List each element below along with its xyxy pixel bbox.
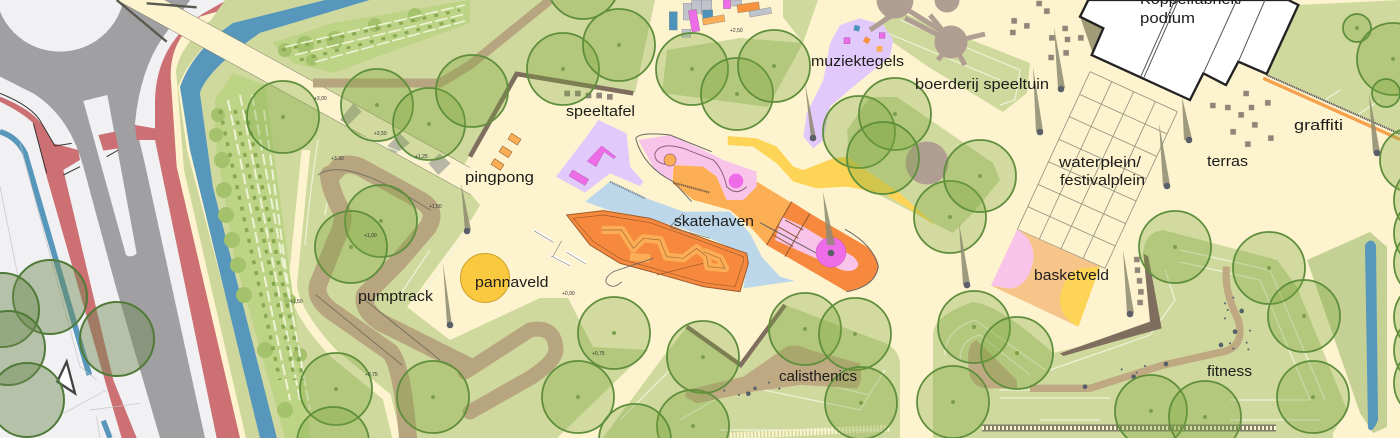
- graffiti wall: [1263, 75, 1400, 139]
- dark orange capsule: [767, 202, 878, 292]
- label: skatehaven: skatehaven: [674, 213, 754, 230]
- label: waterplein / festivalplein: festivalplein: [1060, 172, 1145, 189]
- elevation marks: +3,30: [331, 156, 344, 162]
- label: pingpong: pingpong: [465, 169, 534, 186]
- elevation marks: +0,75: [365, 372, 378, 378]
- skatehaven: [533, 120, 878, 292]
- trees over road: [0, 260, 154, 437]
- terrace wall: [470, 74, 785, 365]
- reed planting strips: [209, 0, 470, 438]
- elevation marks: +0,75: [592, 351, 605, 357]
- elevation marks: +3,00: [314, 96, 327, 102]
- canal bank: [176, 0, 335, 438]
- label: calisthenics: calisthenics: [779, 368, 857, 385]
- building: Koppelfabriek: [1080, 0, 1298, 100]
- label: Koppelfabriek / podium: [1140, 0, 1244, 27]
- speeltafel seats: [564, 91, 613, 100]
- pink bowl: [638, 135, 757, 200]
- top centre coloured blocks: [669, 0, 772, 37]
- elevation marks: +1,00: [364, 233, 377, 239]
- pingpong tables: [491, 133, 521, 170]
- label: waterplein / festivalplein: [1058, 154, 1145, 189]
- label: speeltafel: speeltafel: [566, 103, 635, 120]
- elevation marks: +1,25: [415, 154, 428, 160]
- label: basketveld: basketveld: [1034, 267, 1109, 284]
- label: boerderij speeltuin: boerderij speeltuin: [915, 76, 1049, 93]
- fitness path: [968, 253, 1251, 389]
- yellow ribbon: [728, 136, 937, 227]
- bottom fence: [982, 424, 1276, 432]
- label: Koppelfabriek / podium: podium: [1140, 10, 1195, 27]
- elevation marks: +2,50: [730, 28, 743, 34]
- muziektegels purple area: [803, 18, 893, 148]
- elevation marks: [290, 28, 743, 378]
- pond: [1365, 240, 1378, 430]
- speeltafel purple plaza: [556, 120, 643, 193]
- light blue water: [585, 182, 795, 288]
- basketveld: [991, 229, 1100, 327]
- label: graffiti: graffiti: [1294, 117, 1343, 134]
- label: muziektegels: muziektegels: [811, 53, 904, 70]
- elevation marks: +2,50: [374, 131, 387, 137]
- road marker triangle: [57, 362, 75, 393]
- elevation marks: +1,50: [290, 299, 303, 305]
- label: pannaveld: pannaveld: [475, 274, 548, 291]
- calisthenics sand area: [685, 346, 861, 403]
- boerderij playground: [870, 0, 985, 184]
- cream path and road: [117, 0, 470, 438]
- waterplein grid: [1017, 72, 1177, 268]
- seating tiles: [1010, 1, 1274, 305]
- elevation marks: +1,50: [429, 204, 442, 210]
- water channel: [180, 0, 370, 438]
- tree centre dots: [281, 26, 1395, 428]
- contour lines: [305, 20, 1380, 430]
- top brown path: [313, 0, 550, 83]
- light orange skate zone: [673, 165, 803, 245]
- road area: [0, 0, 257, 438]
- label: fitness: fitness: [1207, 363, 1252, 380]
- label pins: [443, 27, 1380, 328]
- orange boat skate bowl: [567, 211, 748, 292]
- pannaveld circle: [460, 254, 510, 302]
- label: pumptrack: pumptrack: [358, 288, 434, 305]
- label: terras: terras: [1207, 153, 1248, 170]
- label: waterplein / festivalplein: waterplein/: [1058, 154, 1142, 171]
- pumptrack: [316, 164, 556, 438]
- elevation marks: +0,90: [562, 291, 575, 297]
